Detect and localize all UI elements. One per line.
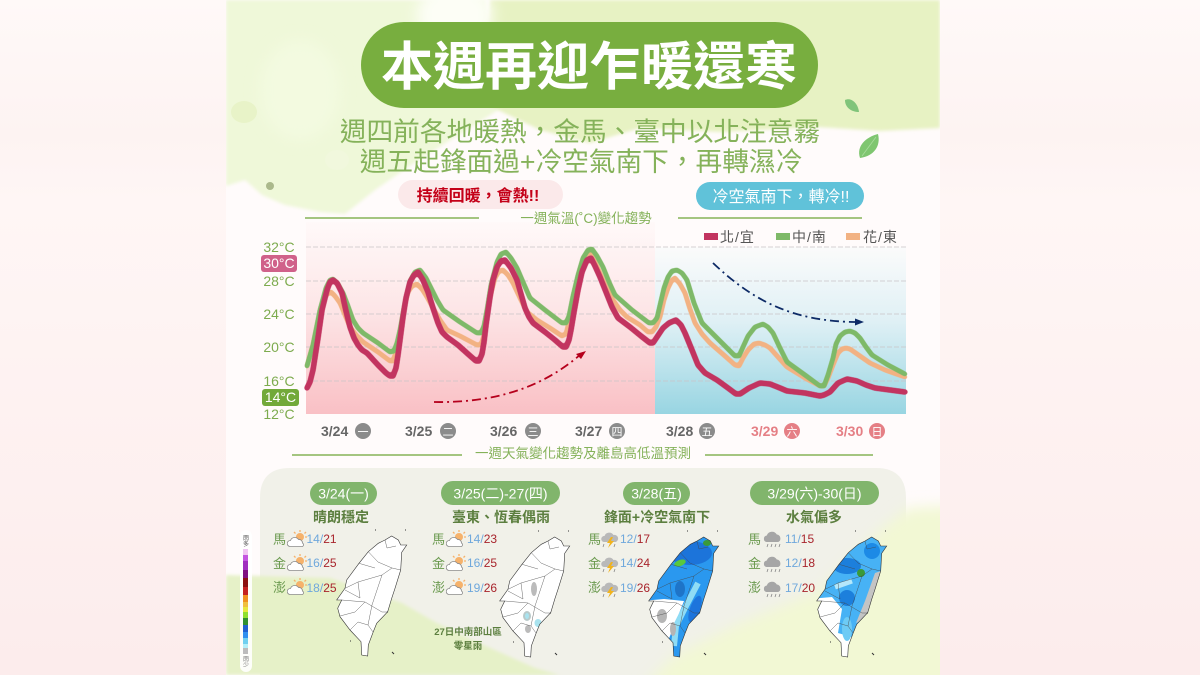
- x axis date labels: 五: [702, 426, 712, 438]
- date pill: [623, 482, 690, 505]
- forecast rows: 11/15: [785, 532, 814, 546]
- forecast rows: 14/21: [306, 532, 337, 546]
- badge: 30 degrees: 30°C: [263, 255, 295, 271]
- subtitle: 週五起鋒面過+冷空氣南下，再轉濕冷: [360, 147, 802, 177]
- watercolor highlight: top left: [414, 0, 499, 22]
- forecast rows: 馬: [748, 532, 761, 547]
- map note: 27日中南部山區: [434, 626, 502, 638]
- forecast rows: 澎: [748, 580, 761, 595]
- watercolor wash: bottom right: [640, 505, 960, 675]
- rainfall map of Taiwan: [816, 530, 888, 658]
- legend: [704, 229, 898, 245]
- panel: 3/25 to 3/27: [432, 481, 573, 661]
- line: north: [307, 258, 905, 396]
- panel: 3/24: [273, 482, 410, 660]
- date pill: 3/29(六)-30(日): [767, 486, 862, 502]
- forecast rows: 14/24: [620, 556, 650, 570]
- title: [361, 22, 818, 108]
- icon: small leaf: [845, 99, 859, 112]
- date pill: 3/25(二)-27(四): [453, 486, 548, 502]
- badge: 14 degrees: 14°C: [265, 389, 296, 405]
- y axis labels: 24°C: [263, 306, 295, 322]
- subtitle: 週四前各地暖熱，金馬、臺中以北注意霧: [340, 117, 820, 147]
- rain legend bar: 少: [243, 662, 249, 669]
- panel: 3/29 to 3/30: [748, 481, 890, 661]
- arrow: cooling trend: [713, 263, 864, 326]
- x axis date labels: 3/27: [575, 423, 602, 439]
- forecast rows: 12/17: [620, 532, 650, 546]
- forecast rows: 14/23: [467, 532, 497, 546]
- forecast rows: 馬: [273, 532, 286, 547]
- x axis date labels: 二: [442, 426, 454, 438]
- date pill: [310, 482, 377, 505]
- x axis date labels: 3/26: [490, 423, 517, 439]
- callout: cooling: 冷空氣南下，轉冷!!: [713, 188, 849, 206]
- callout: cooling: [696, 182, 864, 210]
- x axis date labels: 3/30: [836, 423, 863, 439]
- y axis labels: [263, 239, 295, 422]
- date pill: [441, 481, 560, 505]
- forecast rows: 19/26: [467, 581, 497, 595]
- forecast rows: 澎: [588, 580, 601, 595]
- x axis date labels: [321, 423, 885, 439]
- forecast rows: [588, 532, 650, 598]
- panel heading: 水氣偏多: [786, 509, 842, 525]
- x axis date labels: 3/24: [321, 423, 348, 439]
- rain legend bar: 多: [243, 540, 249, 548]
- forecast rows: 12/18: [785, 556, 815, 570]
- forecast rows: 馬: [588, 532, 601, 547]
- icon: large leaf: [859, 134, 879, 158]
- forecast rows: 金: [273, 556, 286, 571]
- date pill: 3/24(一): [318, 486, 369, 502]
- chart background: warm period: [306, 222, 655, 414]
- subtitle: [340, 117, 820, 177]
- rain legend bar: 雨: [243, 535, 249, 542]
- callout: warming: [398, 180, 563, 209]
- forecast rows: 馬: [432, 532, 445, 547]
- legend: 花/東: [863, 229, 898, 245]
- y axis labels: 12°C: [263, 406, 295, 422]
- forecast rows: 金: [588, 556, 601, 571]
- heading: weekly temperature trend: 一週氣溫(˚C)變化趨勢: [520, 211, 652, 226]
- date pill: [750, 481, 879, 505]
- forecast rows: 澎: [273, 580, 286, 595]
- x axis date labels: 四: [612, 426, 622, 438]
- forecast rows: [273, 530, 337, 595]
- forecast rows: 金: [748, 556, 761, 571]
- line: central and south: [307, 249, 905, 386]
- y axis labels: 32°C: [263, 239, 295, 255]
- watercolor wash: bottom: [226, 575, 560, 675]
- y axis labels: 20°C: [263, 339, 295, 355]
- map of Taiwan with light showers: [499, 530, 570, 658]
- panel heading: 晴朗穩定: [313, 509, 369, 525]
- content panel: [260, 468, 906, 675]
- panel: 3/28: [588, 482, 722, 661]
- panel heading: 鋒面+冷空氣南下: [604, 509, 710, 525]
- x axis date labels: 一: [358, 426, 368, 438]
- forecast rows: 16/25: [467, 556, 497, 570]
- x axis date labels: 3/25: [405, 423, 432, 439]
- y axis labels: 28°C: [263, 273, 295, 289]
- forecast rows: 金: [432, 556, 445, 571]
- forecast rows: 澎: [432, 580, 445, 595]
- rain legend bar: [240, 530, 252, 672]
- decorative blobs: [231, 101, 933, 655]
- rain legend bar: 雨: [243, 656, 249, 663]
- date pill: 3/28(五): [631, 486, 682, 502]
- y axis labels: 16°C: [263, 373, 295, 389]
- map note: [434, 626, 502, 652]
- forecast rows: 19/26: [620, 581, 650, 595]
- forecast rows: 16/25: [306, 556, 337, 570]
- arrow: warming trend: [434, 351, 586, 402]
- forecast rows: [748, 532, 815, 597]
- temperature chart: [306, 222, 906, 414]
- heading: weekly weather forecast: 一週天氣變化趨勢及離島高低溫預測: [475, 445, 691, 461]
- callout: warming: 持續回暖，會熱!!: [417, 186, 539, 205]
- rainfall map of Taiwan: [648, 530, 720, 658]
- forecast rows: 18/25: [306, 581, 337, 595]
- panel heading: 臺東、恆春偶雨: [452, 509, 550, 525]
- chart background: cold period: [655, 247, 906, 414]
- legend: 北/宜: [720, 229, 755, 245]
- title: 本週再迎乍暖還寒: [381, 39, 797, 97]
- watercolor wash: top: [226, 0, 940, 214]
- x axis date labels: 三: [528, 426, 538, 438]
- map note: 零星雨: [454, 641, 483, 652]
- line: east: [307, 253, 905, 386]
- legend: 中/南: [792, 229, 827, 245]
- x axis date labels: 六: [786, 426, 798, 438]
- forecast rows: [432, 530, 497, 595]
- poster background: [226, 0, 940, 675]
- x axis date labels: 日: [872, 426, 882, 438]
- x axis date labels: 3/29: [751, 423, 778, 439]
- forecast rows: 17/20: [785, 581, 815, 595]
- x axis date labels: 3/28: [666, 423, 693, 439]
- map of Taiwan: [336, 530, 408, 656]
